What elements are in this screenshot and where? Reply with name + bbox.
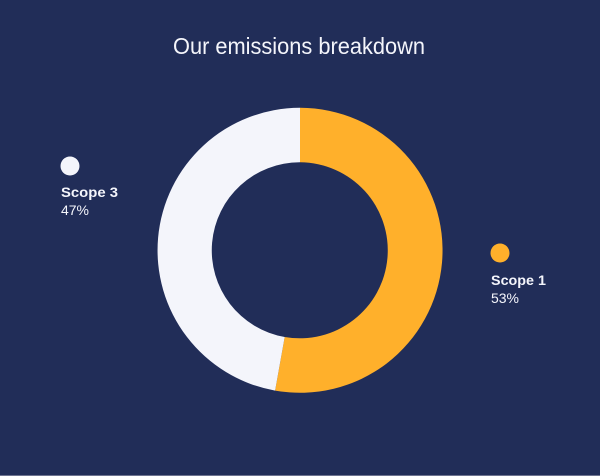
- value: 53%: 53%: [491, 290, 519, 306]
- icon: Scope 1 orange dot: [490, 244, 510, 262]
- donut chart: [158, 108, 443, 393]
- segment: Scope 1, 53%: [275, 108, 443, 393]
- label: Scope 1: Scope 1: [491, 272, 546, 288]
- value: 47%: 47%: [61, 202, 89, 218]
- icon: Scope 3 white dot: [60, 156, 80, 176]
- legend: Scope 3: [60, 156, 118, 218]
- legend: Scope 1: [490, 244, 546, 306]
- label: Scope 3: Scope 3: [61, 184, 118, 200]
- title: Our emissions breakdown: [173, 33, 425, 59]
- segment: Scope 3, 47%: [158, 108, 300, 391]
